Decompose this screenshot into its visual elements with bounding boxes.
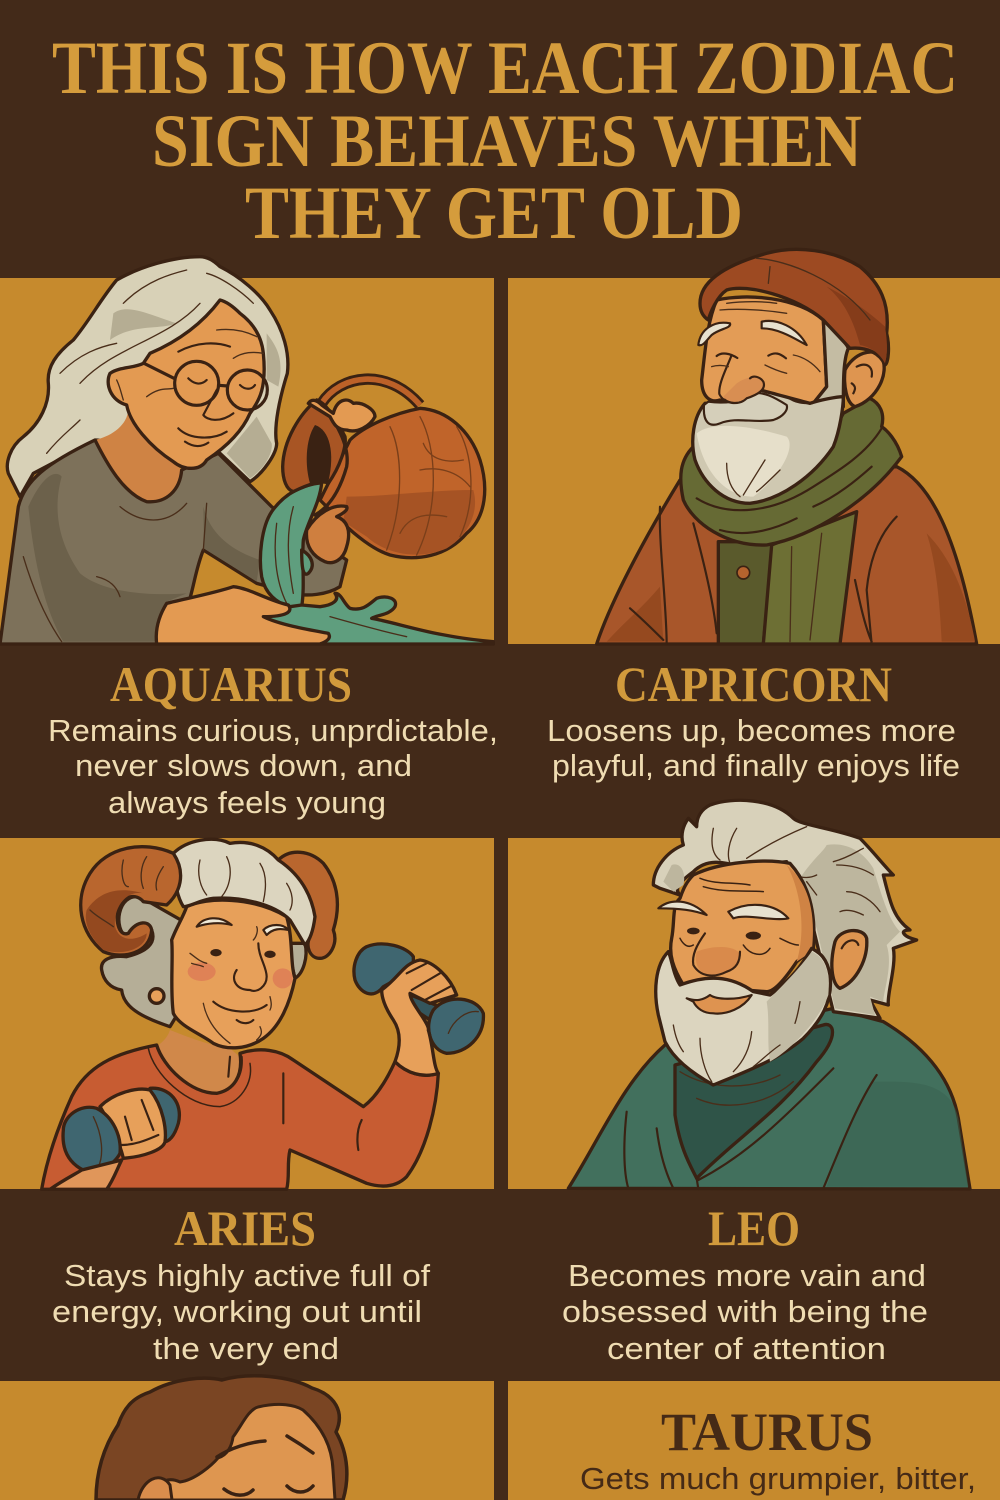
caption: leo [562, 1200, 928, 1366]
lower hand [156, 587, 329, 644]
mouth [687, 995, 752, 1014]
eyes [687, 928, 700, 934]
left hand [100, 1089, 165, 1158]
jug body [320, 408, 485, 558]
water pool [197, 593, 493, 644]
glasses [144, 361, 267, 410]
taurus ear [138, 1478, 172, 1500]
hand under jug [306, 506, 349, 563]
leo figure [568, 800, 970, 1189]
scarf [681, 398, 902, 545]
head [702, 297, 827, 403]
panel: aquarius illustration [0, 257, 494, 644]
front hair [173, 839, 315, 945]
neck [157, 1030, 243, 1093]
right dumbbell left weight [354, 944, 413, 994]
panel: taurus description [508, 1381, 1000, 1500]
caption: aquarius: Remains curious, unprdictable, [48, 713, 498, 748]
caption: capricorn [547, 656, 960, 783]
caption: aquarius: AQUARIUS [110, 656, 352, 712]
brows [197, 918, 232, 927]
facial features [178, 343, 255, 446]
brows [658, 902, 707, 915]
neck outline [157, 1047, 242, 1093]
taurus face [150, 1404, 335, 1500]
capricorn figure [597, 249, 977, 644]
back hair [101, 896, 187, 1027]
caption: leo: obsessed with being the [562, 1294, 928, 1329]
ear [149, 989, 164, 1003]
caption: aries: Stays highly active full of [64, 1258, 430, 1293]
caption: aries: energy, working out until [52, 1294, 422, 1329]
face [108, 300, 264, 468]
hair [653, 800, 917, 1018]
sweater [42, 1045, 438, 1189]
caption: aquarius: never slows down, and [75, 748, 412, 783]
right dumbbell bar [407, 993, 440, 1020]
eyes and wrinkles [717, 353, 786, 358]
nose [696, 947, 740, 977]
turtleneck [675, 1024, 832, 1178]
jug handle [322, 379, 420, 405]
caption: capricorn: playful, and finally enjoys life [552, 748, 960, 783]
caption: aquarius: always feels young [108, 785, 386, 820]
right horn [278, 852, 337, 958]
beard [656, 948, 831, 1085]
caption: aries: ARIES [174, 1200, 316, 1256]
beard [693, 390, 843, 503]
face [172, 900, 295, 1048]
water stream [260, 483, 322, 607]
caption: capricorn: Loosens up, becomes more [547, 713, 956, 748]
taurus heading: TAURUS [661, 1402, 873, 1462]
title [52, 27, 958, 255]
right dumbbell right weight [429, 999, 483, 1053]
jug mouth [283, 400, 345, 492]
caption: aquarius [48, 656, 498, 820]
title: THEY GET OLD [245, 172, 743, 255]
taurus hair [96, 1376, 347, 1500]
robe [568, 1008, 970, 1189]
left horn [81, 847, 181, 955]
panel: leo illustration [508, 800, 1000, 1189]
neck [95, 410, 182, 502]
caption: leo: center of attention [607, 1331, 886, 1366]
shirt [718, 542, 773, 644]
nose [723, 377, 764, 402]
wrinkles [680, 878, 798, 954]
title: SIGN BEHAVES WHEN [152, 100, 862, 183]
mustache [704, 393, 787, 425]
caption: aries [52, 1200, 430, 1366]
hair [7, 257, 288, 497]
caption: leo: LEO [708, 1200, 800, 1256]
right back hair [287, 943, 306, 978]
panel: taurus illustration [0, 1376, 494, 1500]
robe folds [624, 1068, 877, 1189]
face [671, 861, 814, 992]
hat [700, 249, 888, 365]
brows [698, 323, 730, 345]
taurus text: Gets much grumpier, bitter, [580, 1461, 976, 1496]
ear [832, 931, 867, 988]
ear [845, 352, 884, 407]
side hair [813, 320, 848, 407]
panel: aries illustration [0, 838, 494, 1189]
hand on jug [308, 400, 375, 431]
caption: aries: the very end [153, 1331, 339, 1366]
aries figure [42, 839, 483, 1189]
aquarius figure [0, 257, 493, 644]
left forearm [50, 1160, 122, 1189]
taurus brows and eyes [217, 1436, 313, 1495]
caption: leo: Becomes more vain and [568, 1258, 926, 1293]
right hand [382, 960, 457, 1075]
facial features [210, 949, 222, 956]
panel: capricorn illustration [508, 249, 1000, 644]
shirt [0, 440, 347, 644]
coat [597, 467, 977, 644]
left dumbbell back weight [150, 1088, 179, 1142]
caption: capricorn: CAPRICORN [615, 656, 892, 712]
left dumbbell front weight [63, 1107, 120, 1171]
scarf tail [763, 512, 857, 644]
